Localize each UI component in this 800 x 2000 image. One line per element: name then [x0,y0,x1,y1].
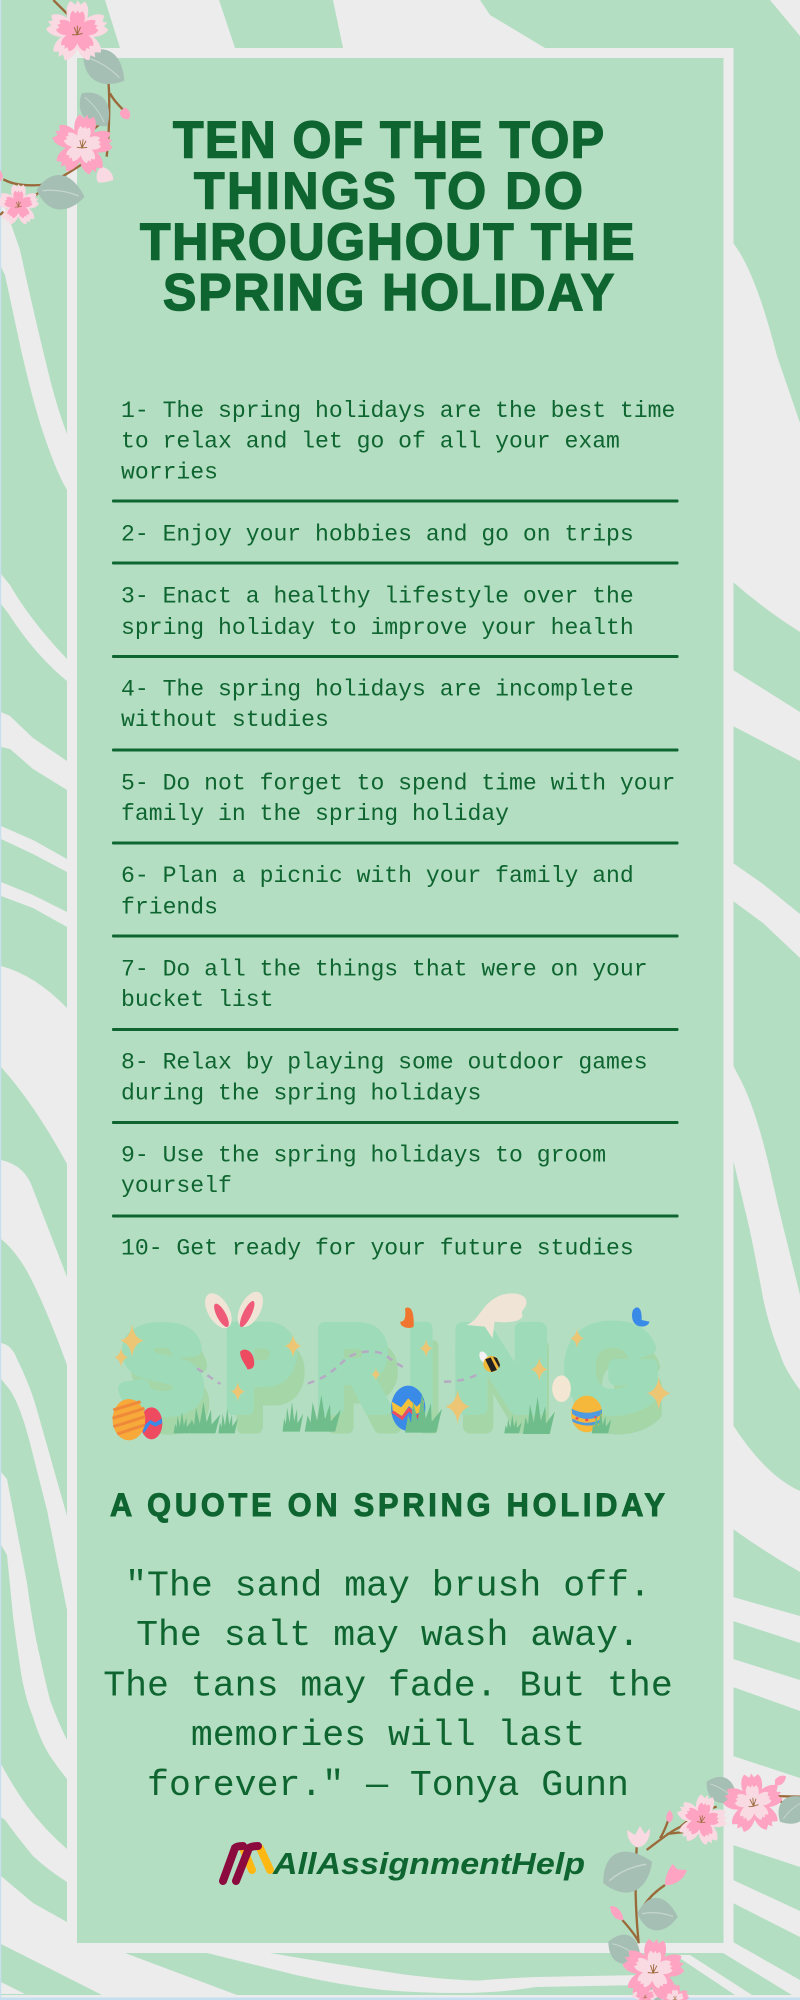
lettering face: I [410,1305,433,1433]
lettering shadow [131,1324,662,1451]
item 6: 6- Plan a picnic with your family and [121,863,634,889]
bunny ears [200,1289,268,1332]
lettering shadow: I [418,1324,439,1451]
illustration: SPRING lettering with eggs, grass and bunny ears [113,1289,670,1451]
eggs [113,1386,602,1440]
lettering shadow: S [131,1324,207,1451]
item 3: spring holiday to improve your health [121,615,634,641]
item 1: to relax and let go of all your exam [121,429,620,455]
item 5: family in the spring holiday [121,801,509,827]
lettering shadow: R [327,1324,397,1451]
bunny foot [467,1293,527,1338]
title: THROUGHOUT THE [140,212,634,271]
panel: central frame [72,53,728,1948]
item 1: 1- The spring holidays are the best time [121,398,675,424]
item 4: without studies [121,707,329,733]
heading: quote: A QUOTE ON SPRING HOLIDAY [110,1487,665,1523]
item 3 [121,584,634,641]
leaves [594,1770,800,2000]
title: TEN OF THE TOP [173,110,604,169]
title: SPRING HOLIDAY [163,263,614,321]
title: THINGS TO DO [194,161,583,220]
item 4: 4- The spring holidays are incomplete [121,676,634,702]
lettering face: N [454,1305,548,1433]
title [140,110,634,321]
quote text: "The sand may brush off. [125,1566,651,1607]
item 8: 8- Relax by playing some outdoor games [121,1050,648,1076]
item 9: 9- Use the spring holidays to groom [121,1142,606,1168]
divider 7 [112,1028,678,1031]
lettering face: P [226,1305,294,1433]
item 9 [121,1142,606,1199]
item 8: during the spring holidays [121,1080,481,1106]
lettering face: R [318,1305,388,1433]
divider 3 [112,655,678,658]
item 6 [121,863,634,920]
divider 5 [112,842,678,844]
bee [478,1351,500,1372]
quote text [103,1566,673,1806]
quote text: The salt may wash away. [136,1615,640,1656]
lettering face: S [122,1306,202,1434]
blossoms [618,1771,788,2000]
item 8 [121,1050,648,1106]
grass [174,1393,611,1434]
item 2: 2- Enjoy your hobbies and go on trips [121,522,634,548]
blossoms [0,0,119,226]
lettering shadow: P [236,1324,302,1451]
item 3: 3- Enact a healthy lifestyle over the [121,584,634,610]
leaves [34,40,133,213]
bunny tail [552,1375,571,1402]
item 1 [121,398,675,485]
item 6: friends [121,894,218,920]
divider 8 [112,1121,678,1124]
quote text: forever." — Tonya Gunn [147,1765,629,1806]
quote text: The tans may fade. But the [103,1665,673,1706]
flight path [197,1351,479,1384]
butterflies [240,1307,649,1369]
lettering shadow: G [574,1324,662,1451]
logo: AllAssignmentHelp: AllAssignmentHelp [272,1846,585,1881]
floral branch: bottom right [594,1770,800,2000]
buds [0,107,130,183]
sparkles [114,1324,670,1424]
divider 2 [112,562,678,564]
item 7 [121,956,648,1013]
item 5 [121,770,675,827]
lettering face [122,1305,658,1434]
buds [610,1776,786,1920]
divider 4 [112,748,678,752]
item 4 [121,676,634,733]
logo mark [223,1846,270,1881]
divider 6 [112,934,678,938]
item 10: 10- Get ready for your future studies [121,1236,634,1262]
item 7: bucket list [121,987,273,1013]
floral branch: top left [0,0,133,226]
quote text: memories will last [191,1715,585,1756]
divider 1 [112,500,678,502]
item 9: yourself [121,1173,232,1199]
item 7: 7- Do all the things that were on your [121,956,648,982]
divider 9 [112,1214,678,1218]
item 1: worries [121,459,218,485]
list: ten things to do [112,398,678,1262]
item 5: 5- Do not forget to spend time with your [121,770,675,796]
lettering shadow: N [462,1324,550,1451]
lettering face: G [567,1305,658,1433]
